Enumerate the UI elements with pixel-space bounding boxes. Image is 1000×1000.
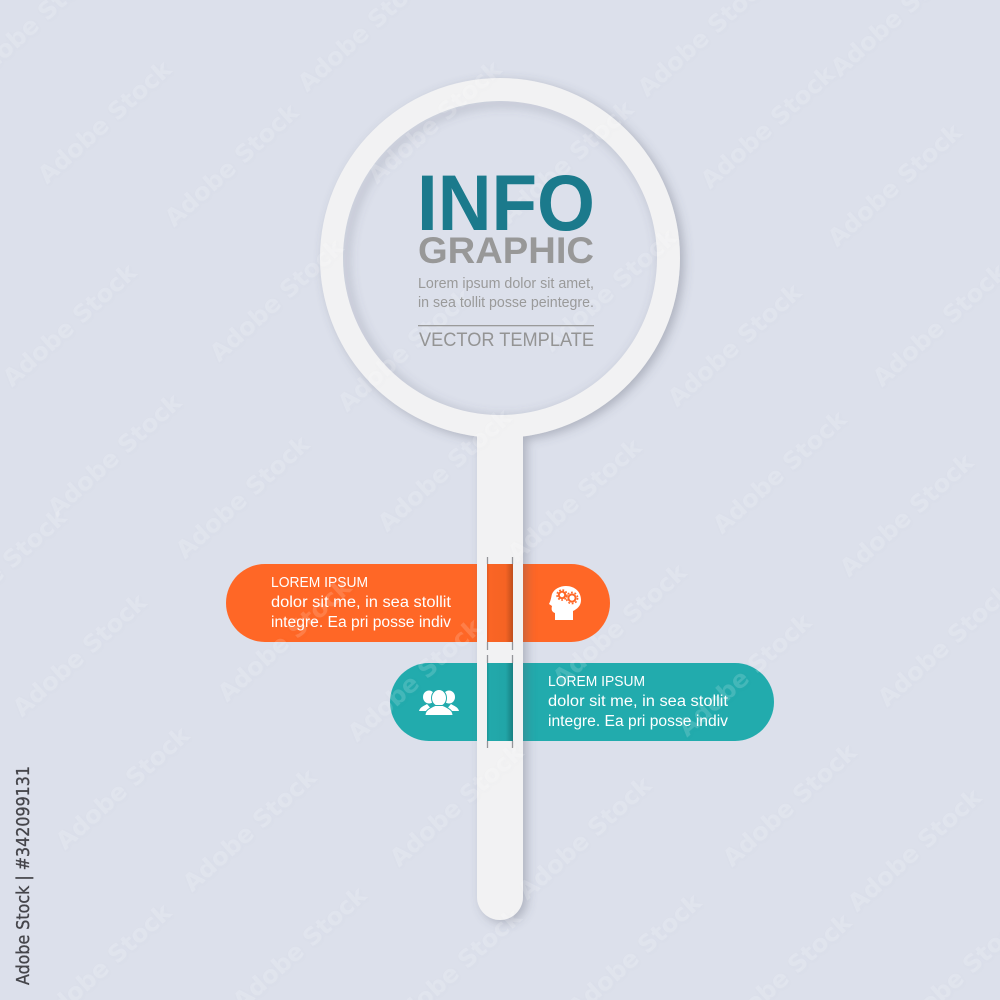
watermark text: Adobe Stock [384,737,530,872]
watermark text: Adobe Stock [342,612,488,747]
teal band text: dolor sit me, in sea stollit [548,693,729,710]
watermark text: Adobe Stock [537,222,683,357]
watermark text: Adobe Stock [372,402,518,537]
handle slits [488,557,512,748]
watermark text: Adobe Stock [834,447,980,582]
orange band text: integre. Ea pri posse indiv [271,614,451,631]
handle window: orange [487,564,513,642]
watermark text: Adobe Stock [7,587,153,722]
description: Lorem ipsum dolor sit amet, [418,276,594,292]
watermark text: Adobe Stock [707,404,853,539]
stock id: Adobe Stock | #342099131 [13,766,34,985]
watermark text: Adobe Stock [170,429,316,564]
watermark text: Adobe Stock [212,572,358,707]
watermark text: Adobe Stock [547,557,693,692]
icon: head with gears [549,586,581,620]
watermark text: Adobe Stock [672,607,818,742]
watermark text: Adobe Stock [512,770,658,905]
magnifier shape: ring and handle [320,78,680,920]
orange band text: dolor sit me, in sea stollit [271,594,452,611]
description [418,276,594,311]
teal band text [548,673,729,730]
watermark text: Adobe Stock [32,54,178,189]
handle window: teal [487,663,513,741]
watermark text: Adobe Stock [717,737,863,872]
watermark text: Adobe Stock [332,282,478,417]
orange band [226,564,610,642]
watermark text: Adobe Stock [494,94,640,229]
inner disc shadow [346,103,662,419]
watermark text: Adobe Stock [822,117,968,252]
watermark text: Adobe Stock [50,720,196,855]
heading: GRAPHIC: GRAPHIC [418,230,594,271]
teal band text: LOREM IPSUM [548,673,645,690]
watermark text: Adobe Stock [159,97,305,232]
teal band text: integre. Ea pri posse indiv [548,713,728,730]
watermark text: Adobe Stock [0,257,143,392]
title block [417,158,595,351]
orange band text [271,574,452,631]
watermark text: Adobe Stock [204,232,350,367]
watermark text: Adobe Stock [362,54,508,189]
watermark text: Adobe Stock [502,432,648,567]
watermark text: Adobe Stock [695,59,841,194]
subtitle: vector template: VECTOR TEMPLATE [419,330,594,351]
teal band [390,663,774,741]
watermark text: Adobe Stock [42,387,188,522]
watermark text: Adobe Stock [177,762,323,897]
description: in sea tollit posse peintegre. [418,295,594,311]
watermark text: Adobe Stock [842,782,988,917]
icon: group of people [419,690,459,716]
heading: INFO: INFO [417,158,595,247]
orange band text: LOREM IPSUM [271,574,368,591]
watermark text: Adobe Stock [662,277,808,412]
